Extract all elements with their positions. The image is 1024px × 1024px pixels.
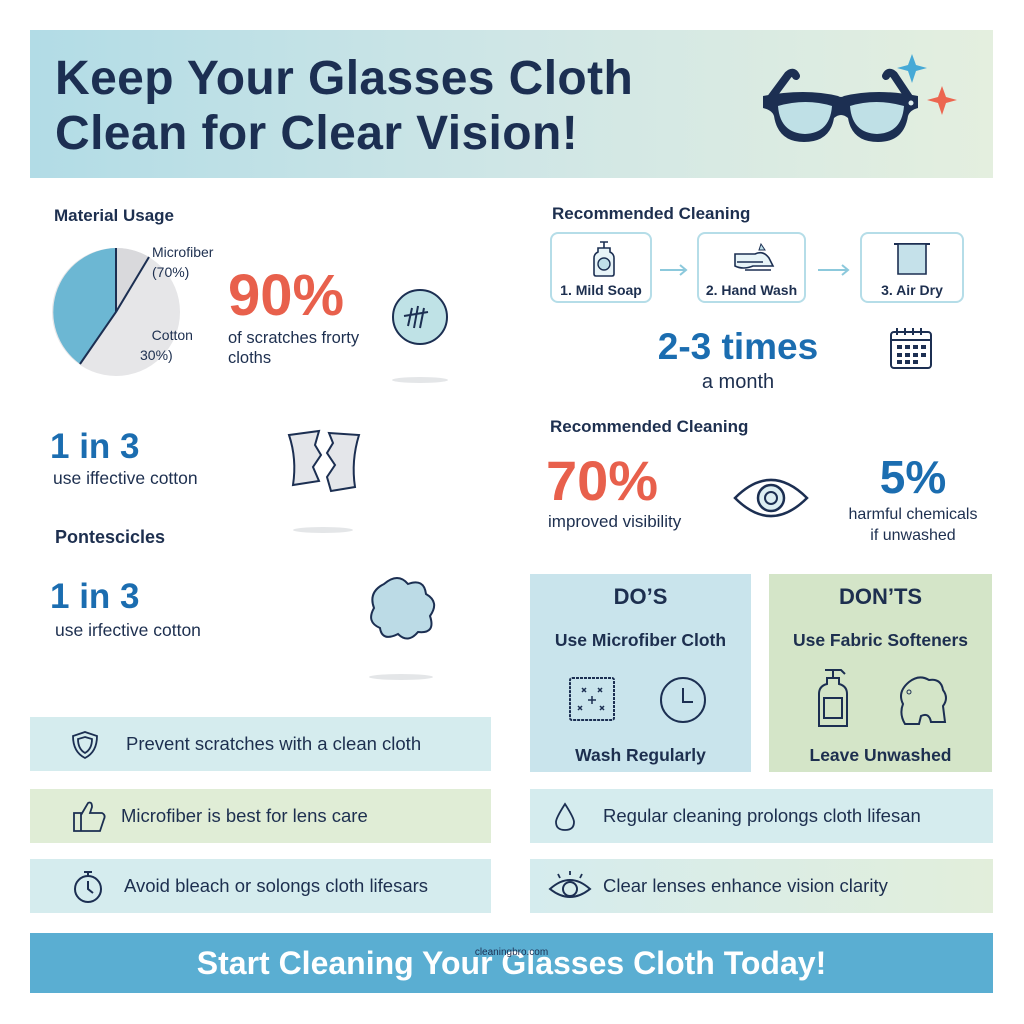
footer banner: cleaningbro.com — [475, 947, 548, 958]
tip: avoid bleach — [30, 859, 491, 913]
panel: do's — [530, 574, 751, 772]
panel: material usage — [52, 206, 448, 383]
stat: 90%: of scratches frorty — [228, 329, 359, 347]
footer banner: Start Cleaning Your Glasses Cloth Today! — [197, 945, 826, 981]
title — [55, 52, 633, 160]
icon: glasses with sparkles — [763, 54, 957, 142]
title: Clean for Clear Vision! — [55, 107, 578, 160]
step 3 air dry — [860, 232, 964, 303]
stat: 70% improved visibility: 70% — [546, 449, 658, 512]
tip: avoid bleach: Avoid bleach or solongs cloth lifesars — [124, 875, 428, 896]
panel: material usage: Cotton — [152, 327, 193, 343]
stat: 1 in 3 ineffective cotton: use iffective cotton — [53, 468, 198, 488]
tip: prevent scratches: Prevent scratches with a clean cloth — [126, 733, 421, 754]
header banner — [30, 30, 993, 178]
panel: do's: Use Microfiber Cloth — [555, 630, 726, 650]
tip: regular cleaning — [530, 789, 993, 843]
arrow — [660, 264, 688, 276]
stat: 90% — [228, 263, 360, 367]
icon: scratched lens — [392, 289, 448, 383]
panel: don'ts: DON’TS — [839, 584, 922, 609]
heading: pontescicles: Pontescicles — [55, 527, 165, 547]
pie labels — [152, 244, 214, 280]
step 1 mild soap — [550, 232, 652, 303]
heading: material usage: Material Usage — [54, 206, 174, 225]
stat: 1 in 3 ineffective cotton — [50, 427, 198, 488]
panel: do's: DO’S — [614, 584, 667, 609]
heading: recommended cleaning 2: Recommended Cleaning — [550, 417, 748, 436]
heading: recommended cleaning: Recommended Cleaning — [552, 204, 750, 223]
panel: material usage: 30%) — [140, 347, 173, 363]
step 3 air dry: 3. Air Dry — [881, 282, 943, 298]
icon: stained cloth — [900, 676, 947, 725]
panel: don'ts: Leave Unwashed — [810, 745, 952, 765]
tip: clear lenses: Clear lenses enhance vision clarity — [603, 875, 888, 896]
icon: torn cloth — [288, 430, 360, 533]
icon: spray bottle — [818, 669, 848, 727]
panel: don'ts — [769, 574, 992, 772]
pie labels: Microfiber — [152, 244, 213, 260]
panel: recommended cleaning steps — [550, 204, 964, 393]
panel: don'ts: Use Fabric Softeners — [793, 630, 968, 650]
stat: 90%: cloths — [228, 349, 271, 367]
stat: 1 in 3 second — [50, 577, 201, 640]
arrow — [818, 264, 850, 276]
stat: 70% improved visibility — [546, 449, 682, 531]
footer banner — [30, 933, 993, 993]
step 2 hand wash: 2. Hand Wash — [706, 282, 797, 298]
stat: 1 in 3 second: use irfective cotton — [55, 620, 201, 640]
tip: microfiber best — [30, 789, 491, 843]
tip: microfiber best: Microfiber is best for lens care — [121, 805, 368, 826]
tip: regular cleaning: Regular cleaning prolongs cloth lifesan — [603, 805, 921, 826]
icon: eye — [733, 478, 809, 518]
stat: 70% improved visibility: improved visibility — [548, 512, 681, 531]
stat: 1 in 3 second: 1 in 3 — [50, 577, 139, 616]
stat: 5% harmful chemicals: if unwashed — [870, 527, 956, 544]
icon: microfiber cloth — [569, 677, 615, 721]
panel: do's: Wash Regularly — [575, 745, 706, 765]
stat: 5% harmful chemicals: harmful chemicals — [849, 506, 977, 523]
icon: clock cycle — [660, 677, 706, 723]
stat: 2-3 times a month: a month — [702, 371, 774, 393]
stat: 1 in 3 ineffective cotton: 1 in 3 — [50, 427, 139, 466]
pie labels: (70%) — [152, 264, 189, 280]
pie chart — [52, 248, 180, 376]
step 2 hand wash — [697, 232, 806, 303]
stat: 90%: 90% — [228, 263, 344, 328]
stat: 5% harmful chemicals — [849, 451, 977, 544]
title: Keep Your Glasses Cloth — [55, 52, 633, 105]
tip: prevent scratches — [30, 717, 491, 771]
stat: 5% harmful chemicals: 5% — [880, 451, 946, 503]
tip: clear lenses — [530, 859, 993, 913]
icon: cloth blob — [369, 577, 436, 680]
stat: 2-3 times a month: 2-3 times — [658, 326, 818, 367]
stat: 2-3 times a month — [658, 326, 818, 393]
icon: calendar — [890, 328, 932, 369]
step 1 mild soap: 1. Mild Soap — [560, 282, 642, 298]
